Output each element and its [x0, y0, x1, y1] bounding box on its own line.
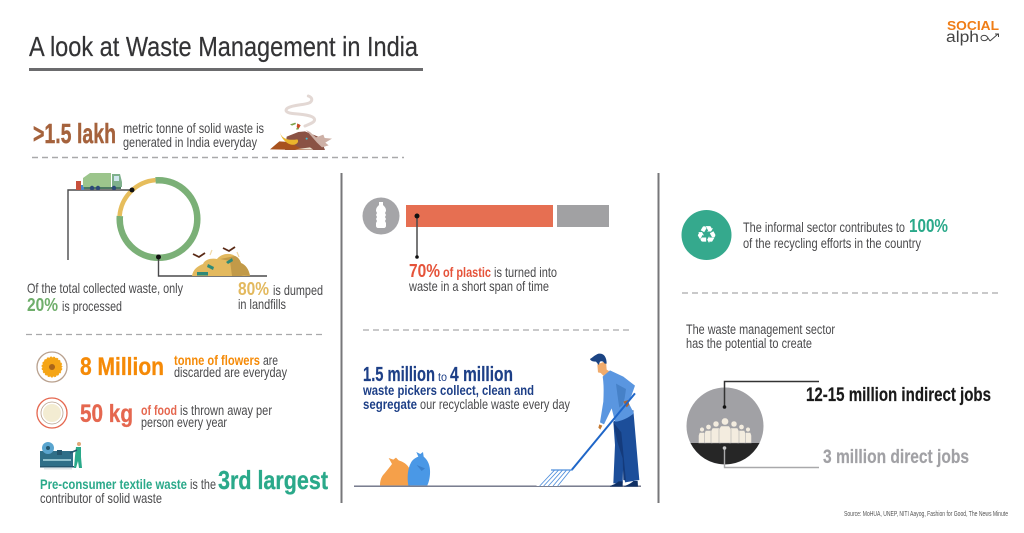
logo: Social Alpha: alph — [946, 29, 979, 46]
logo: Social Alpha — [946, 19, 999, 46]
text: 80% landfills: in landfills — [238, 296, 286, 312]
text: 80% landfills: 80% — [238, 279, 269, 299]
text: potential: has the potential to create — [686, 336, 812, 351]
text: plastic waste: waste in a short span of time — [408, 278, 549, 294]
stat: daily solid waste generated: generated in India everyday — [123, 134, 257, 150]
donut chart: processed vs landfill — [68, 180, 267, 276]
divider — [26, 334, 324, 336]
icon: smoking waste pile — [270, 96, 332, 150]
column divider — [340, 173, 342, 503]
text: waste pickers: our recyclable waste every day — [420, 396, 570, 412]
text: direct jobs: 3 million direct jobs — [823, 447, 969, 468]
stat: textile waste: 3rd largest — [218, 465, 328, 495]
stat: daily solid waste generated: metric tonne of solid waste is — [123, 120, 264, 136]
stat: daily solid waste generated — [33, 118, 264, 150]
ground line — [354, 486, 641, 487]
text: informal sector: of the recycling efforts in the country — [743, 235, 921, 251]
text: waste pickers: to — [438, 370, 447, 384]
chart: jobs circle with people — [686, 382, 819, 468]
divider — [32, 156, 404, 158]
stat: flowers discarded — [80, 353, 287, 381]
column divider — [658, 173, 660, 503]
title: A look at Waste Management in India — [29, 31, 418, 62]
stat: food thrown away: of food — [141, 403, 177, 418]
stat: flowers discarded: are — [263, 353, 278, 368]
icon: landfill mound — [192, 247, 250, 276]
logo: Social Alpha: SOCIAL — [947, 19, 999, 33]
text: waste pickers: 4 million — [450, 364, 513, 386]
text: waste pickers: waste pickers collect, clean and — [362, 382, 534, 398]
text: plastic waste — [408, 261, 557, 294]
text: plastic waste: of plastic — [443, 264, 491, 280]
stat: flowers discarded: discarded are everyday — [174, 365, 287, 380]
text: 20% processed — [27, 280, 183, 315]
text: plastic waste: is turned into — [494, 264, 557, 280]
text: 20% processed: is processed — [62, 298, 122, 314]
text: 80% landfills — [238, 279, 323, 312]
title — [29, 31, 423, 71]
stat: flowers discarded: tonne of flowers — [174, 353, 260, 368]
icon: garbage truck — [76, 173, 122, 190]
text: potential — [686, 322, 835, 351]
text: waste pickers — [362, 364, 570, 412]
stat: daily solid waste generated: >1.5 lakh — [33, 118, 116, 149]
figure: waste picker with rake — [536, 354, 639, 487]
stat: textile waste — [40, 465, 328, 506]
icon: garbage bags — [380, 452, 430, 485]
icon: plate of food — [37, 398, 67, 428]
stat: textile waste: Pre-consumer textile waste — [40, 476, 187, 492]
text: informal sector: 100% — [909, 216, 948, 236]
text: informal sector: The informal sector contributes to — [743, 219, 905, 235]
text: waste pickers: segregate — [363, 396, 417, 412]
text: potential: The waste management sector — [686, 322, 835, 337]
divider — [363, 329, 633, 331]
icon: flower — [37, 352, 67, 382]
text: 20% processed: Of the total collected waste, only — [27, 280, 183, 296]
text: plastic waste: 70% — [409, 261, 440, 281]
icon: recycling: ♻ — [696, 221, 717, 249]
stat: food thrown away: 50 kg — [80, 400, 133, 428]
stat: food thrown away: person every year — [141, 415, 227, 430]
icon: plastic bottle — [362, 198, 400, 234]
stat: food thrown away — [80, 400, 272, 430]
text: 20% processed: 20% — [27, 295, 58, 315]
stat: textile waste: is the — [190, 476, 216, 492]
icon: textile machine and worker — [40, 442, 82, 470]
bar chart: plastic — [406, 205, 609, 259]
text: 80% landfills: is dumped — [273, 282, 323, 298]
divider — [682, 292, 998, 294]
text: waste pickers: 1.5 million — [363, 364, 435, 386]
icon: recycling — [682, 210, 732, 260]
stat: flowers discarded: 8 Million — [80, 353, 164, 381]
stat: textile waste: contributor of solid waste — [40, 490, 162, 506]
stat: food thrown away: is thrown away per — [180, 403, 272, 418]
text: informal sector — [743, 216, 948, 251]
